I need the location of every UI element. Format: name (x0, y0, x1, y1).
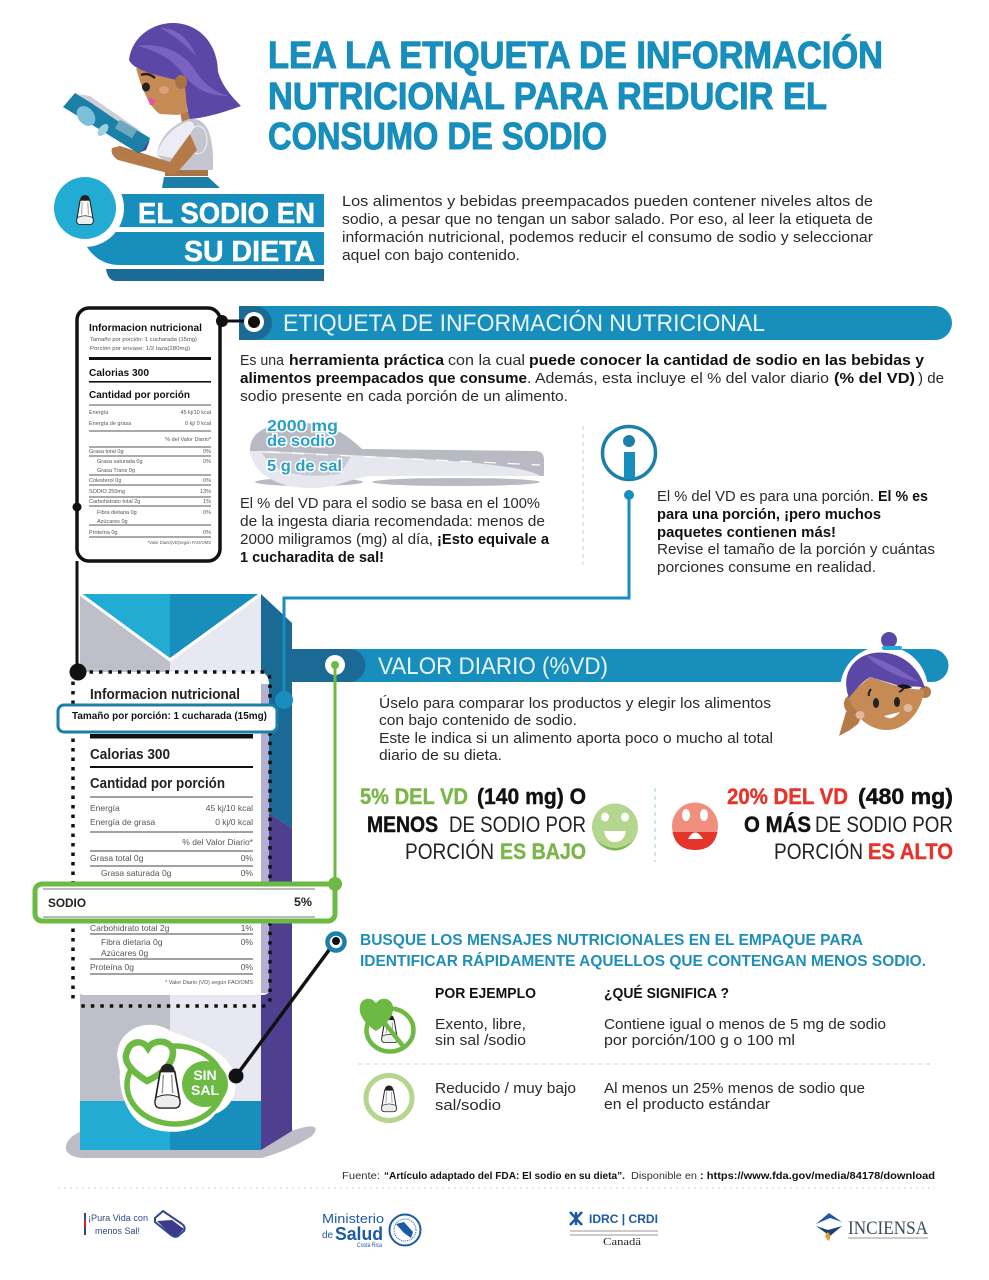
icon: spoon with salt: 2000 mg (267, 418, 338, 435)
text: percent basis: ¡Esto equivale a (437, 532, 550, 548)
small nutrition label card: Carbohidrato total 2g (89, 499, 140, 505)
text: per portion note: El % es (878, 489, 928, 505)
large nutrition label on box: Grasa total 0g (90, 853, 144, 863)
callout: low sodium: PORCIÓN (405, 839, 494, 864)
large nutrition label on box: Fibra dietaria 0g (101, 937, 163, 947)
heading: busque los mensajes (360, 932, 926, 970)
title: LEA LA ETIQUETA DE INFORMACIÓN (268, 33, 883, 77)
logo: pura vida: menos Sal! (95, 1226, 140, 1237)
callout: sodium highlight: 5% (294, 895, 312, 909)
callout: high sodium (727, 784, 953, 864)
small nutrition label card: Grasa total 0g (89, 449, 124, 455)
intro text: Los alimentos y bebidas preempacados pueden contener niveles altos de (342, 194, 873, 210)
logo: inciensa: INCIENSA (848, 1218, 928, 1239)
heading: busque los mensajes: IDENTIFICAR RÁPIDAMENTE AQUELLOS QUE CONTENGAN MENOS SODIO. (360, 953, 926, 970)
table: message meanings: en el producto estándar (604, 1097, 770, 1113)
large nutrition label on box: * Valor Diario (VD) según FAO/OMS (165, 980, 253, 986)
text: percent basis: 2000 miligramos (mg) al día, (240, 532, 433, 548)
connector dot: black line top (70, 502, 86, 680)
seal: sin sal: SAL (191, 1082, 219, 1098)
small nutrition label card: *Valor Diario(VD)según FAO/OMS (148, 540, 211, 545)
table: message meanings: por porción/100 g o 100 ml (604, 1033, 795, 1049)
table: message meanings: POR EJEMPLO (435, 986, 536, 1002)
large nutrition label on box: Azúcares 0g (101, 948, 149, 958)
icon: happy face (592, 804, 638, 850)
callout: serving size highlight (58, 691, 293, 732)
table: message meanings: Exento, libre, (435, 1017, 526, 1033)
large nutrition label on box: Carbohidrato total 2g (90, 923, 170, 933)
large nutrition label on box: 0 kj/0 kcal (215, 817, 253, 827)
paragraph: etiqueta description: con la cual (448, 353, 525, 369)
large nutrition label on box: Proteína 0g (90, 962, 134, 972)
small nutrition label card (77, 308, 220, 561)
intro text: información nutricional, podemos reducir el consumo de sodio y seleccionar (342, 230, 873, 246)
logo: idrc crdi canada: IDRC | CRDI (589, 1212, 658, 1226)
small nutrition label card: Azúcares 0g (97, 519, 128, 525)
text: valor diario description: Este le indica si un alimento aporta poco o mucho al total (379, 731, 773, 747)
logo: ministerio de salud: Ministerio (322, 1211, 384, 1226)
callout: sodium highlight: SODIO (48, 898, 86, 910)
callout: low sodium (360, 784, 586, 864)
small nutrition label card: Grasa saturada 0g (97, 459, 143, 465)
callout: low sodium: (140 mg) O (477, 784, 586, 809)
callout: high sodium: O MÁS (744, 812, 811, 837)
header bar: valor diario (292, 649, 949, 682)
icon: reduced salt (366, 1076, 412, 1120)
title: NUTRICIONAL PARA REDUCIR EL (268, 76, 827, 118)
logo: ministerio de salud (322, 1211, 420, 1249)
header bar: etiqueta (239, 306, 952, 340)
connector: green line (325, 655, 345, 891)
table: message meanings (358, 985, 935, 1114)
small nutrition label card: Informacion nutricional (89, 322, 202, 334)
paragraph: etiqueta description (240, 353, 944, 405)
callout: sodium highlight (35, 884, 335, 921)
logo: ministerio de salud: Costa Rica (357, 1243, 383, 1249)
large nutrition label on box: 0% (241, 868, 253, 878)
small nutrition label card: 45 kj/10 kcal (180, 410, 211, 416)
small nutrition label card: 0% (203, 459, 211, 465)
small nutrition label card: 0% (203, 510, 211, 516)
header bar: etiqueta: ETIQUETA DE INFORMACIÓN NUTRICIONAL (283, 310, 765, 337)
source line: “Artículo adaptado del FDA: El sodio en su dieta”. (384, 1171, 625, 1182)
connector: card to etiqueta header (216, 312, 264, 332)
large nutrition label on box: Calorias 300 (90, 747, 170, 763)
large nutrition label on box: 0% (241, 962, 253, 972)
table: message meanings: sin sal /sodio (435, 1033, 526, 1049)
logo: ministerio de salud: Salud (335, 1224, 383, 1244)
small nutrition label card: Energía (89, 410, 109, 416)
banner: el sodio en su dieta: EL SODIO EN (138, 198, 315, 230)
table: message meanings: Reducido / muy bajo (435, 1081, 576, 1097)
large nutrition label on box: Informacion nutricional (90, 686, 240, 703)
small nutrition label card: Colesterol 0g (89, 478, 121, 484)
paragraph: etiqueta description: . Además, esta incluye el % del valor diario (527, 371, 829, 387)
text: valor diario description: Úselo para comparar los productos y elegir los alimentos (379, 695, 771, 712)
callout: low sodium: ES BAJO (500, 839, 586, 864)
large nutrition label on box: % del Valor Diario* (182, 837, 254, 847)
logo: inciensa (816, 1213, 928, 1241)
blue connector to serving size (284, 490, 634, 700)
logo: ministerio de salud: de (322, 1230, 334, 1241)
text: per portion note (657, 489, 935, 576)
callout: high sodium: DE SODIO POR (815, 812, 953, 837)
small nutrition label card: 0% (203, 530, 211, 536)
large nutrition label on box: Energía (90, 803, 120, 813)
logo: pura vida: ¡Pura Vida con (88, 1213, 148, 1224)
header bar: valor diario: VALOR DIARIO (%VD) (378, 653, 608, 680)
small nutrition label card: Grasa Trans 0g (97, 468, 135, 474)
text: percent basis (240, 496, 550, 566)
table: message meanings: ¿QUÉ SIGNIFICA ? (604, 985, 729, 1002)
illustration: woman reading a package (63, 23, 241, 188)
icon: information (602, 426, 656, 480)
text: valor diario description: con bajo contenido de sodio. (379, 713, 577, 729)
text: per portion note: porciones consume en realidad. (657, 560, 876, 576)
callout: high sodium: 20% DEL VD (727, 784, 848, 809)
paragraph: etiqueta description: puede conocer la cantidad de sodio en las bebidas y (529, 353, 924, 369)
small nutrition label card: Porción por envase: 1/2 taza(280mg) (90, 346, 190, 352)
banner: el sodio en su dieta (46, 169, 324, 281)
logo: idrc crdi canada: Canadä (603, 1236, 641, 1248)
paragraph: etiqueta description: ) de (918, 371, 944, 387)
small nutrition label card: SODIO 250mg (89, 489, 125, 495)
paragraph: etiqueta description: sodio presente en cada porción de un alimento. (240, 389, 568, 405)
icon: spoon with salt (250, 418, 544, 488)
table: message meanings: Contiene igual o menos de 5 mg de sodio (604, 1017, 886, 1033)
large nutrition label on box: 1% (241, 923, 253, 933)
text: valor diario description: diario de su dieta. (379, 748, 502, 764)
text: per portion note: Revise el tamaño de la porción y cuántas (657, 542, 935, 558)
logo: idrc crdi canada (570, 1212, 658, 1248)
text: percent basis: El % del VD para el sodio se basa en el 100% (240, 496, 540, 512)
intro text: aquel con bajo contenido. (342, 248, 520, 264)
small nutrition label card: 0% (203, 449, 211, 455)
box: carton package (66, 594, 316, 1158)
seal: sin sal: SIN (193, 1067, 217, 1083)
callout: low sodium: DE SODIO POR (449, 812, 586, 837)
small nutrition label card: Cantidad por porción (89, 389, 190, 401)
small nutrition label card: 13% (200, 489, 211, 495)
source line: Disponible en (631, 1171, 697, 1182)
paragraph: etiqueta description: alimentos preempacados que consume (240, 371, 527, 387)
small nutrition label card: Fibra dietaria 0g (97, 510, 137, 516)
intro text: sodio, a pesar que no tengan un sabor salado. Por eso, al leer la etiqueta de (342, 212, 873, 228)
source line: Fuente: (342, 1171, 380, 1182)
heading: busque los mensajes: BUSQUE LOS MENSAJES NUTRICIONALES EN EL EMPAQUE PARA (360, 932, 863, 949)
large nutrition label on box: 0% (241, 937, 253, 947)
text: per portion note: El % del VD es para una porción. (657, 489, 874, 505)
callout: high sodium: (480 mg) (858, 784, 953, 809)
paragraph: etiqueta description: Es una (240, 353, 285, 369)
paragraph: etiqueta description: (% del VD) (834, 371, 915, 387)
text: valor diario description (379, 695, 773, 764)
paragraph: etiqueta description: herramienta práctica (289, 353, 445, 369)
small nutrition label card: 1% (203, 499, 211, 505)
icon: salt free (360, 999, 414, 1052)
large nutrition label on box: Cantidad por porción (90, 776, 225, 792)
icon: spoon with salt: 5 g de sal (267, 458, 342, 475)
large nutrition label on box: Energía de grasa (90, 817, 155, 827)
title: CONSUMO DE SODIO (268, 116, 607, 158)
small nutrition label card: 0% (203, 478, 211, 484)
text: per portion note: para una porción, ¡pero muchos (657, 507, 881, 523)
small nutrition label card: 0 kj/ 0 kcal (185, 421, 211, 427)
logo: pura vida (84, 1211, 185, 1237)
seal: sin sal (117, 1025, 236, 1132)
callout: low sodium: 5% DEL VD (360, 784, 468, 809)
title (268, 33, 883, 158)
large nutrition label on box: 0% (241, 853, 253, 863)
connector: black line to seal (228, 934, 344, 1084)
small nutrition label card: Calorias 300 (89, 367, 149, 379)
text: percent basis: de la ingesta diaria recomendada: menos de (240, 514, 545, 530)
callout: low sodium: MENOS (367, 812, 438, 837)
large nutrition label on box: Grasa saturada 0g (101, 868, 172, 878)
icon: spoon with salt: de sodio (267, 433, 335, 450)
source line: : https://www.fda.gov/media/84178/download (700, 1171, 935, 1182)
text: per portion note: paquetes contienen más! (657, 525, 836, 541)
icon: woman face (839, 632, 931, 736)
text: percent basis: 1 cucharadita de sal! (240, 550, 384, 566)
source line (342, 1171, 935, 1182)
small nutrition label card: % del Valor Diario* (165, 437, 212, 443)
small nutrition label card: Energía de grasa (89, 421, 132, 427)
large nutrition label on box (73, 672, 270, 1006)
small nutrition label card: Proteína 0g (89, 530, 117, 536)
icon: worried face (672, 802, 718, 850)
callout: serving size highlight: Tamaño por porción: 1 cucharada (15mg) (72, 710, 267, 722)
table: message meanings: sal/sodio (435, 1098, 501, 1114)
small nutrition label card: Tamaño por porción: 1 cucharada (15mg) (90, 337, 197, 343)
large nutrition label on box: 45 kj/10 kcal (206, 803, 253, 813)
intro text (342, 194, 873, 264)
banner: el sodio en su dieta: SU DIETA (184, 236, 315, 268)
callout: high sodium: PORCIÓN (774, 839, 863, 864)
table: message meanings: Al menos un 25% menos de sodio que (604, 1081, 865, 1097)
callout: high sodium: ES ALTO (868, 839, 953, 864)
